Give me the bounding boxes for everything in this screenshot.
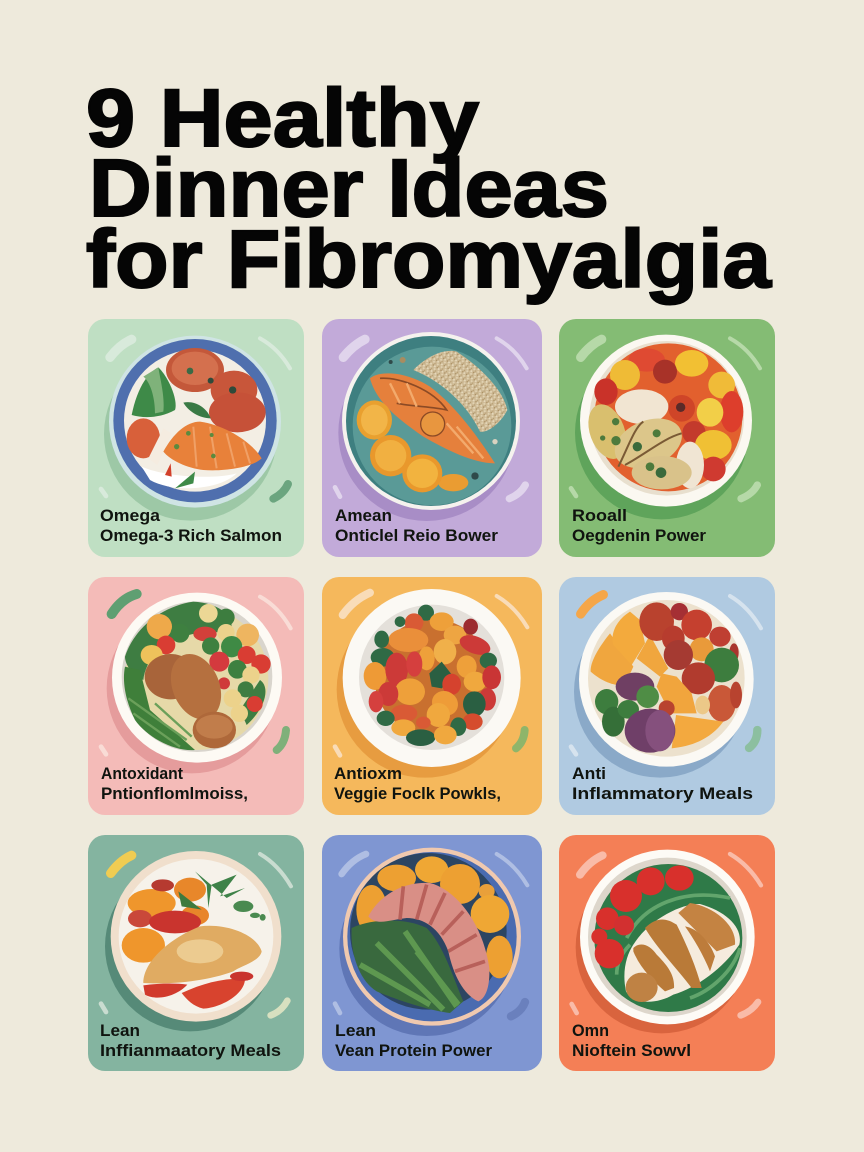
label: veggie bowls: Veggie Foclk Powkls,: [334, 784, 501, 803]
panel: anti-inflammatory meals: [559, 577, 775, 815]
panel: protein bowl: [559, 835, 775, 1071]
title: Dinner Ideas: [89, 143, 609, 234]
title: [86, 73, 772, 305]
label: protein bowl: Nioftein Sowvl: [572, 1041, 691, 1060]
label: onticle reio bower: Amean: [335, 506, 392, 525]
bowl: squash, tomatoes and purple cabbage: [571, 592, 761, 778]
label: oegdenin power: Rooall: [572, 506, 627, 525]
label: onticle reio bower: [335, 506, 498, 545]
panel: lean protein power: [322, 835, 542, 1071]
label: oegdenin power: Oegdenin Power: [572, 526, 706, 545]
panel: oegdenin power bowl: [559, 319, 775, 557]
plate: salmon with quinoa and squash: [335, 332, 527, 521]
plate: salmon and tomato: [101, 336, 290, 521]
label: omega-3 rich salmon: [100, 506, 282, 545]
panel: antioxidant bowl: [88, 577, 304, 815]
label: omega-3 rich salmon: Omega-3 Rich Salmon: [100, 526, 282, 545]
bowl: chicken, rice and peppers: [571, 335, 760, 519]
panel: omega-3 salmon: [88, 319, 304, 557]
bowl: mixed roasted veggies: [335, 589, 527, 778]
label: protein bowl: [572, 1021, 691, 1060]
label: anti-inflammatory meals: [572, 764, 753, 803]
plate: sliced meat, squash and greens: [335, 848, 527, 1036]
label: vean protein power: [335, 1021, 492, 1060]
label: lean inflammatory meals: [100, 1021, 281, 1060]
label: lean inflammatory meals: Inffianmaatory Meals: [100, 1041, 281, 1060]
label: vean protein power: Vean Protein Power: [335, 1041, 492, 1060]
label: antioxidant: [101, 764, 248, 803]
label: oegdenin power: [572, 506, 706, 545]
panel: lean inflammatory meals: [88, 835, 304, 1071]
label: omega-3 rich salmon: Omega: [100, 506, 161, 525]
label: antioxidant: Antoxidant: [101, 764, 183, 783]
label: lean inflammatory meals: Lean: [100, 1021, 140, 1040]
label: veggie bowls: [334, 764, 501, 803]
plate: grilled chicken with peppers: [101, 851, 291, 1031]
label: anti-inflammatory meals: Inflammatory Meals: [572, 784, 753, 803]
bowl: sliced chicken, tomatoes and greens: [572, 850, 761, 1033]
label: antioxidant: Pntionflomlmoiss,: [101, 784, 248, 803]
title: 9 Healthy: [86, 73, 479, 164]
panel: veggie bowl: [322, 577, 542, 815]
label: veggie bowls: Antioxm: [334, 764, 402, 783]
bowl: greens, roasted meat and vegetables: [101, 593, 291, 773]
title: for Fibromyalgia: [86, 214, 772, 305]
label: vean protein power: Lean: [335, 1021, 376, 1040]
panel: salmon quinoa plate: [322, 319, 542, 557]
label: anti-inflammatory meals: Anti: [572, 764, 606, 783]
label: onticle reio bower: Onticlel Reio Bower: [335, 526, 498, 545]
label: protein bowl: Omn: [572, 1021, 609, 1040]
